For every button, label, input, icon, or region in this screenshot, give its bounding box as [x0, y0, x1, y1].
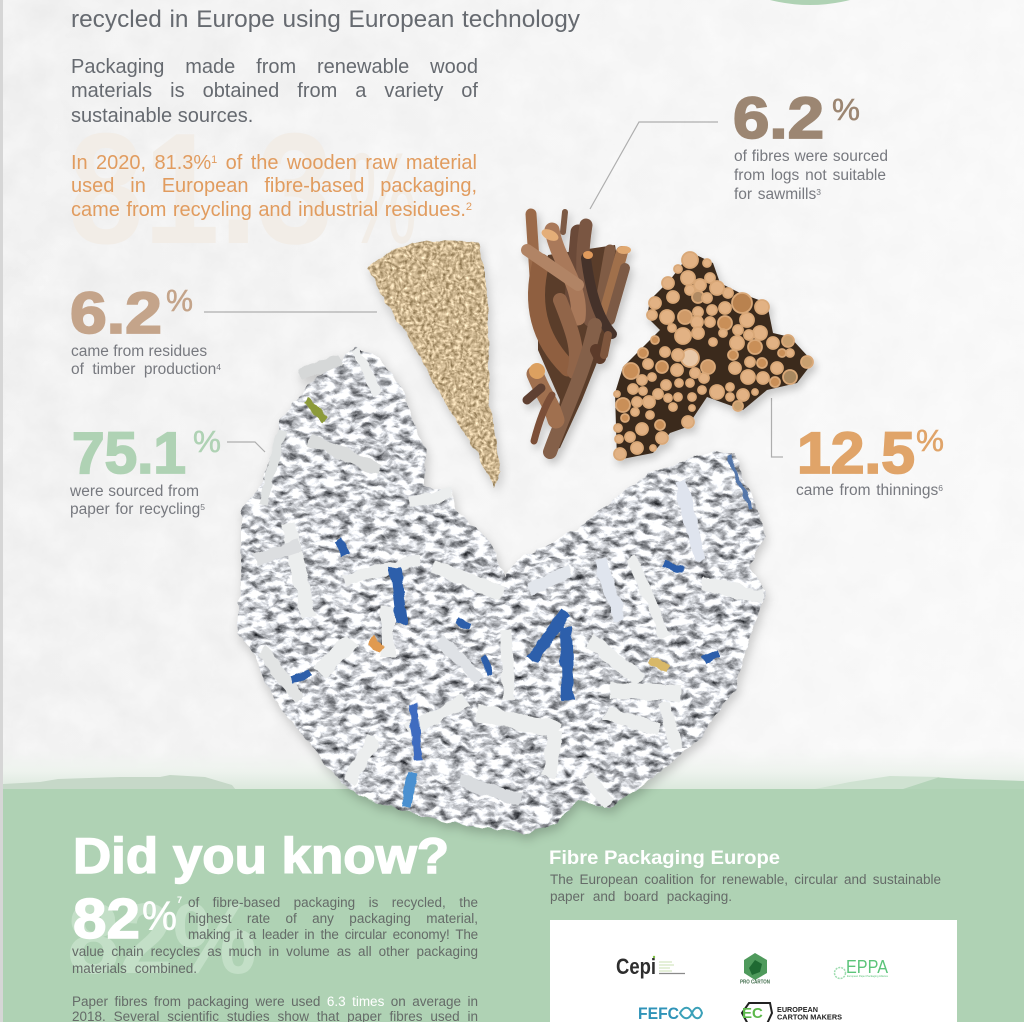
caption: paper for recycling: paper for recycling5	[70, 501, 205, 518]
orange statement: used in European fibre-based packaging,	[71, 175, 477, 197]
caption: residues of timber production: of timber production4	[71, 361, 221, 378]
caption: logs not suitable for sawmills: of fibres were sourced	[734, 148, 888, 165]
recycling text: value chain recycles as much in volume as all other packaging	[72, 944, 478, 959]
ghost figure 81.3%: %	[347, 125, 417, 271]
logo: EPPA: European Paper Packaging Alliance	[847, 974, 888, 978]
big figure: 6.2% residues	[70, 281, 193, 346]
big figure: 75.1% paper: %	[193, 424, 221, 459]
logo: Pro Carton	[740, 953, 770, 986]
green footer band	[3, 748, 1024, 1022]
intro paragraph: materials is obtained from a variety of	[71, 80, 478, 102]
wedge: shredded recycled paper	[238, 348, 766, 833]
logo: ECMA: CARTON MAKERS	[777, 1012, 842, 1022]
big figure: 6.2% logs	[733, 86, 860, 151]
recycling text: making it a leader in the circular economy! The	[188, 927, 478, 942]
intro paragraph: Packaging made from renewable wood	[71, 56, 478, 78]
logo: EPPA: EPPA	[846, 957, 888, 977]
paper fibres reuse text: Paper fibres from packaging were used 6.3 times on average in	[72, 994, 478, 1009]
big figure: 82%	[73, 887, 182, 951]
ghost figure 82%: 82%	[67, 883, 257, 995]
caption: residues of timber production: came from residues	[71, 343, 207, 360]
logo: Cepi: Cepi	[616, 954, 656, 979]
big figure: 82%: 7	[177, 895, 182, 905]
big figure: 12.5% thinnings: %	[916, 423, 944, 458]
logo: ECMA: EUROPEAN	[777, 1005, 818, 1014]
leader lines	[204, 122, 783, 457]
caption: logs not suitable for sawmills: for sawmills3	[734, 186, 821, 203]
big figure: 75.1% paper: 75.1	[72, 421, 186, 486]
wedge: branches	[527, 212, 631, 452]
recycling text: highest rate of any packaging material,	[188, 911, 478, 926]
big figure: 6.2% logs: 6.2	[733, 86, 824, 151]
coalition description: The European coalition for renewable, circular and sustainable	[550, 872, 941, 887]
recycling text: materials combined.	[72, 961, 197, 976]
logo: Cepi	[616, 954, 685, 979]
big figure: 12.5% thinnings: 12.5	[797, 421, 915, 486]
big figure: 82%: 82	[73, 887, 140, 951]
logo: ECMA	[742, 1003, 842, 1022]
heading: did you know: Did you know?	[73, 828, 449, 884]
heading: fibre packaging europe: Fibre Packaging Europe	[549, 848, 780, 869]
orange statement: came from recycling and industrial residues.2	[71, 199, 472, 221]
caption: thinnings: came from thinnings6	[796, 482, 943, 499]
ghost figure 81.3%: 81.3	[68, 101, 333, 277]
logo: ECMA: EC	[742, 1005, 763, 1022]
logo: Pro Carton: PRO CARTON	[740, 980, 770, 986]
logo panel	[550, 920, 957, 1022]
intro paragraph: sustainable sources.	[71, 105, 253, 127]
big figure: 6.2% residues: %	[166, 283, 193, 318]
big figure: 6.2% logs: %	[832, 92, 860, 127]
caption: logs not suitable for sawmills: from logs not suitable	[734, 167, 886, 184]
recycling text: of fibre-based packaging is recycled, the	[188, 895, 478, 910]
logo: EPPA	[834, 957, 888, 978]
orange statement: In 2020, 81.3%1 of the wooden raw material	[71, 152, 477, 174]
big figure: 82%: %	[142, 893, 177, 939]
coalition description: paper and board packaging.	[550, 889, 732, 904]
big figure: 6.2% residues: 6.2	[70, 281, 162, 346]
headline: recycled in Europe using European technology	[71, 6, 580, 33]
logo: FEFCO	[638, 1004, 702, 1022]
wedge: wood chips	[367, 240, 500, 488]
wedge: log pile	[614, 252, 813, 460]
green circle at top	[648, 0, 972, 5]
caption: paper for recycling: were sourced from	[70, 483, 199, 500]
